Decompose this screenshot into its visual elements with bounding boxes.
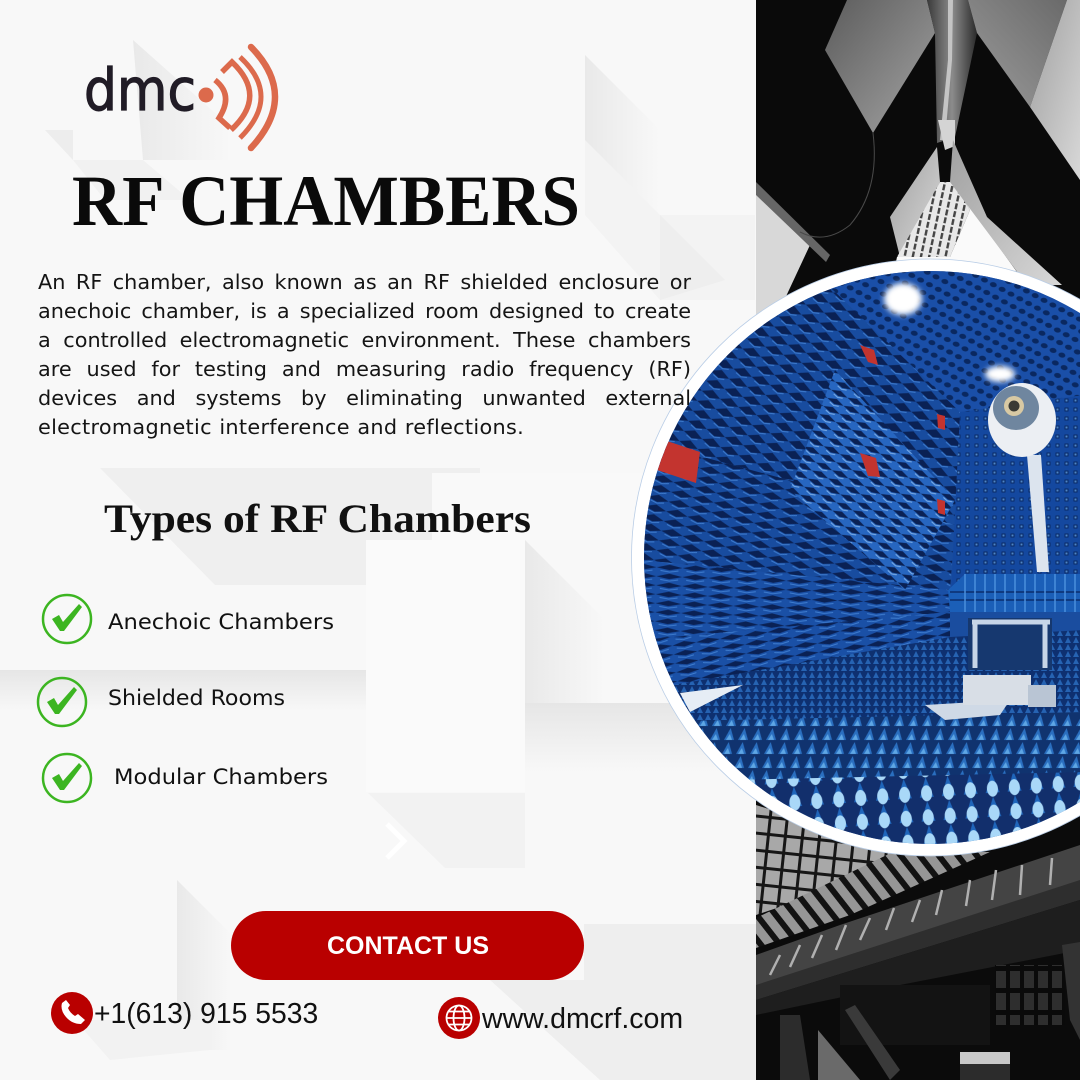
icon: white chevron <box>387 824 404 858</box>
phone contact: +1(613) 915 5533 <box>94 997 318 1029</box>
white ring <box>632 259 1080 856</box>
body text: devices and systems by eliminating unwanted external <box>38 386 691 410</box>
photo bottom: walkway and skylight <box>756 790 1080 1080</box>
red absorbers <box>657 345 945 515</box>
diagonal panel <box>790 370 955 590</box>
background photo: black and white architecture <box>756 0 1080 1080</box>
icon: phone <box>51 992 93 1034</box>
body text <box>38 270 692 439</box>
antenna head <box>988 383 1056 457</box>
list item: shielded rooms <box>38 678 285 726</box>
icon: check <box>43 595 91 643</box>
photo top: building underside <box>756 0 1080 320</box>
website contact <box>438 997 683 1039</box>
subheading: Types of RF Chambers <box>104 496 531 541</box>
horizontal absorber block <box>948 574 1080 612</box>
antenna pole <box>1027 455 1049 572</box>
icon: globe <box>438 997 480 1039</box>
circle photo: anechoic chamber <box>632 259 1080 856</box>
ceiling absorbers <box>831 271 1080 412</box>
body text: anechoic chamber, is a specialized room designed to create <box>38 299 691 323</box>
left wall absorbers <box>640 262 960 690</box>
logo <box>84 47 275 148</box>
body text: electromagnetic interference and reflections. <box>38 415 524 439</box>
floor absorbers <box>640 630 1080 725</box>
website contact: www.dmcrf.com <box>481 1003 683 1035</box>
list item: modular chambers: Modular Chambers <box>114 765 328 789</box>
logo: dmc <box>84 56 196 124</box>
list item: anechoic chambers: Anechoic Chambers <box>108 610 334 634</box>
ceiling lights <box>884 283 1015 382</box>
contact button: CONTACT US <box>327 932 489 960</box>
list item: shielded rooms: Shielded Rooms <box>108 686 285 710</box>
test equipment <box>963 618 1056 707</box>
list item: anechoic chambers <box>43 595 334 643</box>
back wall absorbers <box>951 396 1080 582</box>
list item: modular chambers <box>43 754 328 802</box>
phone contact <box>51 992 318 1034</box>
body text: are used for testing and measuring radio frequency (RF) <box>38 357 691 381</box>
icon: check <box>38 678 86 726</box>
background: folded paper shapes <box>0 40 756 1080</box>
contact button <box>231 911 584 980</box>
body text: An RF chamber, also known as an RF shielded enclosure or <box>38 270 691 294</box>
body text: a controlled electromagnetic environment. These chambers <box>38 328 691 352</box>
icon: check <box>43 754 91 802</box>
title: RF CHAMBERS <box>72 161 580 241</box>
